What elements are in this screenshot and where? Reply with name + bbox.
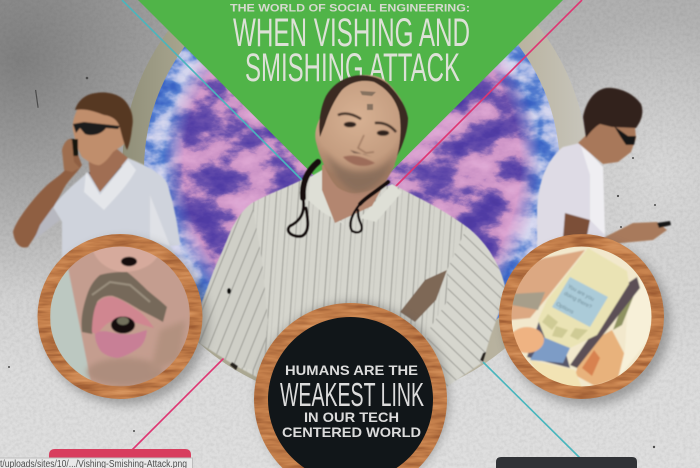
- slogan line one: HUMANS ARE THE: [285, 363, 418, 378]
- forearm: [603, 222, 667, 246]
- title line two: SMISHING ATTACK: [245, 46, 460, 90]
- dark card top edge: [496, 457, 637, 468]
- face: [73, 100, 129, 165]
- nose: [94, 246, 157, 272]
- hand and fingers: [510, 250, 585, 320]
- lower lip: [95, 330, 147, 358]
- shadows beneath wood badges: [42, 239, 670, 468]
- wood badge: old mobile phone: [499, 234, 664, 399]
- pink card top edge: [49, 449, 191, 468]
- paper specks: [8, 77, 656, 448]
- phone photo: [510, 246, 655, 391]
- mouth photo: [50, 240, 190, 390]
- wood ring: [499, 234, 664, 399]
- receding hair: [319, 75, 408, 156]
- shirt: [199, 176, 505, 390]
- upper arm: [563, 213, 590, 238]
- arm and hand: [13, 139, 82, 248]
- slogan emphasis: WEAKEST LINK: [280, 376, 424, 413]
- hair: [75, 92, 133, 150]
- forehead marks: [360, 91, 376, 110]
- pocket spot: [227, 288, 231, 294]
- face: [315, 75, 406, 193]
- long hair strands: [288, 162, 388, 236]
- title line one: WHEN VISHING AND: [233, 11, 470, 55]
- photo: man texting, right: [537, 88, 671, 250]
- collar: [308, 170, 402, 225]
- gap under arm: [400, 270, 447, 322]
- globe disc with tan rim and clouds: [122, 26, 585, 381]
- green title triangle: [138, 0, 563, 212]
- right sleeve: [425, 227, 505, 388]
- sleeve hem: [230, 352, 486, 370]
- wood ring: [254, 303, 447, 468]
- screen text: [556, 284, 594, 314]
- stubble chin: [87, 358, 163, 386]
- left sleeve: [199, 203, 268, 372]
- thumb: [510, 327, 544, 353]
- shirt: [537, 143, 605, 250]
- screen text: Options: [555, 301, 575, 316]
- teal diagonal line: [122, 0, 580, 458]
- photo: central man: [199, 75, 505, 390]
- shirt: [53, 158, 180, 262]
- phone faceplate: [538, 248, 629, 348]
- slogan line three: IN OUR TECH: [304, 410, 399, 425]
- phone: [657, 221, 671, 228]
- phone: [71, 139, 78, 156]
- wood ring: [38, 234, 202, 399]
- neck: [322, 165, 395, 223]
- pink diagonal line: [131, 0, 582, 451]
- phone body side: [570, 277, 640, 368]
- sunglasses: [614, 126, 636, 145]
- neck and face: [578, 122, 636, 164]
- keypad: [542, 314, 588, 340]
- screen: [552, 277, 608, 327]
- neck: [88, 145, 128, 192]
- eyebrows, eyes, nose, mouth: [338, 114, 396, 166]
- wood badge: mouth close-up: [38, 234, 202, 399]
- wood badge: weakest link slogan: [254, 303, 447, 468]
- hair: [583, 88, 642, 138]
- title kicker: THE WORLD OF SOCIAL ENGINEERING:: [230, 2, 470, 14]
- moustache: [81, 272, 167, 334]
- title text block: [230, 2, 470, 90]
- upper lip: [92, 297, 154, 335]
- screen text: You are you: [566, 284, 595, 303]
- sunglasses: [73, 122, 120, 135]
- open mouth: [111, 316, 135, 334]
- blue lower body: [530, 337, 570, 363]
- slogan line four: CENTERED WORLD: [282, 425, 421, 440]
- stubble shadow: [324, 150, 396, 192]
- black disc: [268, 317, 433, 468]
- slogan text: [280, 363, 424, 440]
- photo: man on phone, left: [13, 92, 180, 262]
- screen text: doing there?: [563, 291, 593, 311]
